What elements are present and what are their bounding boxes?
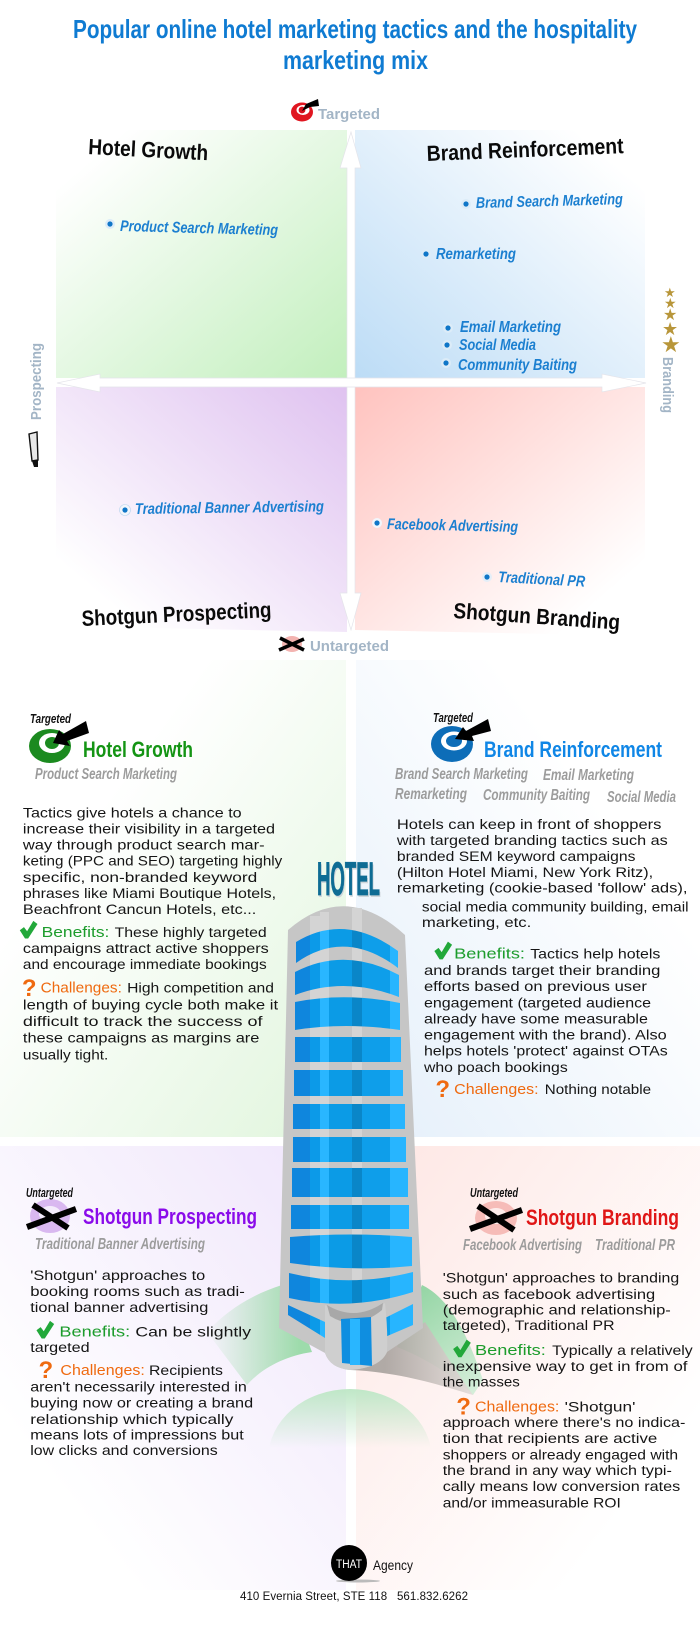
text block: description and pros and cons: increase their visibility in a targeted [23, 820, 275, 836]
text block: description and pros and cons: and/or immeasurable ROI [443, 1494, 621, 1510]
item: brand search marketing: Brand Search Marketing [476, 191, 623, 212]
axis label: prospecting [28, 343, 45, 467]
item: product search marketing: Product Search Marketing [120, 218, 279, 239]
tactics list: Facebook Advertising [463, 1237, 582, 1254]
text block: description and pros and cons: specific, non-branded keyword [23, 869, 257, 885]
axis label: branding [659, 286, 681, 413]
text block: description and pros and cons: Nothing notable [545, 1081, 651, 1097]
icon: gold stars: ★ [662, 319, 678, 340]
text block: description and pros and cons: and encourage immediate bookings [23, 956, 267, 972]
tactics list: Brand Search Marketing [395, 766, 528, 783]
text block: description and pros and cons: difficult to track the success of [23, 1013, 263, 1029]
text block: description and pros and cons: (demographic and relationship- [443, 1302, 671, 1318]
text block: description and pros and cons: tional banner advertising [30, 1299, 208, 1315]
text block: description and pros and cons: usually tight. [23, 1046, 108, 1062]
ground disc [268, 1389, 432, 1529]
text block: description and pros and cons: means lots of impressions but [30, 1427, 244, 1443]
panel: shotgun prospecting details [26, 1185, 257, 1458]
text block: description and pros and cons: Benefits: [454, 945, 525, 962]
icon: crossed purple target [27, 1199, 76, 1233]
text block: description and pros and cons: Benefits: [475, 1342, 546, 1359]
text block: description and pros and cons: keting (PPC and SEO) targeting highly [23, 853, 282, 869]
tower body [279, 906, 423, 1370]
quadrant: shotgun prospecting area [56, 387, 347, 632]
text block: description and pros and cons: Tactics help hotels [530, 945, 660, 961]
illustration: hotel tower: HOTEL [318, 854, 381, 907]
text block: description and pros and cons: low clicks and conversions [30, 1442, 218, 1458]
address: 410 Evernia Street, STE 118 561.832.6262 [240, 1591, 468, 1603]
hotel sign [317, 852, 381, 907]
quadrant: hotel growth area [56, 130, 347, 378]
tower light columns [310, 908, 362, 1300]
arrow: vertical axis [340, 132, 361, 630]
icon: gold stars: ★ [663, 305, 677, 324]
text block: description and pros and cons: relationship which typically [30, 1411, 233, 1427]
text block: description and pros and cons: social media community building, email [422, 898, 689, 914]
text block: description and pros and cons: remarketing (cookie-based 'follow' ads), [397, 880, 688, 896]
text block: description and pros and cons: tion that recipients are active [443, 1430, 658, 1446]
shadow of tower [350, 1322, 473, 1395]
title [73, 14, 637, 75]
panel: hotel growth details [20, 711, 282, 1062]
axis label: untargeted [279, 636, 389, 655]
heading: shotgun prospecting: Shotgun Prospecting [83, 1204, 257, 1229]
text block: description and pros and cons: Beachfront Cancun Hotels, etc... [23, 901, 256, 917]
axis label: branding: Branding [659, 357, 676, 413]
text block: description and pros and cons: length of buying cycle both make it [23, 996, 278, 1012]
text block: description and pros and cons: campaigns attract active shoppers [23, 940, 269, 956]
tower windows [285, 920, 415, 1340]
text block: description and pros and cons: Challenges: [60, 1362, 145, 1379]
text block: description and pros and cons: Typically a relatively [552, 1342, 693, 1358]
icon: green target [29, 721, 89, 763]
text block: description and pros and cons: Challenges: [454, 1081, 539, 1098]
axis label: untargeted: Untargeted [310, 638, 389, 655]
panel: marketing mix matrix [56, 130, 646, 636]
text block: description and pros and cons [396, 816, 689, 1103]
text block: description and pros and cons: the masses [443, 1373, 520, 1389]
text block: description and pros and cons: Recipients [149, 1362, 223, 1378]
label: targeted: Targeted [433, 710, 474, 725]
tower entrance [325, 1303, 387, 1370]
text block: description and pros and cons: Tactics give hotels a chance to [23, 805, 242, 821]
text block: description and pros and cons: helps hotels 'protect' against OTAs [424, 1043, 668, 1059]
icon: crossed red target [470, 1201, 522, 1235]
item: traditional banner advertising: Traditional Banner Advertising [135, 498, 324, 518]
panel: shotgun branding details [443, 1185, 693, 1510]
text block: description and pros and cons: these campaigns as margins are [23, 1030, 260, 1046]
text block: description and pros and cons: and brands target their branding [424, 962, 660, 978]
text block: description and pros and cons: targeted [30, 1339, 90, 1355]
panel: lower quadrant backgrounds [0, 660, 700, 1590]
heading: shotgun prospecting: Shotgun Prospecting [81, 597, 272, 631]
tactic: product search marketing: Product Search Marketing [35, 766, 177, 783]
text block: description and pros and cons: cally means low conversion rates [443, 1478, 680, 1494]
axis label: prospecting: Prospecting [28, 343, 45, 420]
text block: description and pros and cons: ? [435, 1076, 450, 1103]
item: community baiting: Community Baiting [458, 357, 577, 374]
text block: description and pros and cons [30, 1267, 253, 1458]
text block: description and pros and cons: already have some measurable [424, 1010, 648, 1026]
quadrant: brand reinforcement area [355, 130, 645, 378]
ground ring: left [207, 1285, 312, 1385]
text block: description and pros and cons: marketing, etc. [422, 914, 531, 930]
text block: description and pros and cons: Benefits: [59, 1323, 130, 1340]
footer: logo and address [240, 1545, 468, 1603]
item: social media [442, 337, 536, 354]
text block: description and pros and cons: High competition and [127, 980, 274, 996]
text block: description and pros and cons: Benefits: [42, 924, 109, 941]
text block: description and pros and cons: ? [22, 975, 37, 1002]
text block: description and pros and cons: shoppers or already engaged with [443, 1446, 678, 1462]
text block: description and pros and cons: approach where there's no indica- [443, 1414, 686, 1430]
icon: gold stars [661, 286, 681, 358]
tactic: traditional banner advertising: Traditional Banner Advertising [35, 1236, 205, 1253]
text block: description and pros and cons: Challenges: [41, 980, 122, 997]
icon: gold stars: ★ [664, 286, 676, 301]
text block: description and pros and cons: Hotels can keep in front of shoppers [397, 816, 661, 832]
heading: hotel growth: Hotel Growth [83, 737, 193, 762]
quadrant: shotgun branding area [355, 387, 645, 636]
text block: description and pros and cons: aren't necessarily interested in [30, 1379, 247, 1395]
text block: description and pros and cons: 'Shotgun' approaches to [30, 1267, 205, 1283]
logo: THAT Agency [331, 1545, 413, 1582]
logo: THAT Agency: Agency [373, 1557, 413, 1573]
heading: shotgun branding: Shotgun Branding [453, 598, 621, 635]
text block: description and pros and cons: the brand in any way which typi- [443, 1462, 672, 1478]
icon: gold stars: ★ [661, 333, 681, 358]
icon: gold stars: ★ [664, 296, 677, 312]
text block: description and pros and cons [20, 805, 282, 1062]
tactics list [395, 766, 676, 806]
logo: THAT Agency: THAT [336, 1559, 362, 1571]
text block: description and pros and cons: 'Shotgun' approaches to branding [443, 1269, 679, 1285]
heading: hotel growth: Hotel Growth [88, 134, 209, 165]
text block: description and pros and cons: engagement with the brand). Also [424, 1027, 667, 1043]
icon: blue target [431, 719, 491, 762]
illustration: hotel tower [214, 862, 483, 1440]
text block: description and pros and cons: way through product search mar- [22, 836, 265, 852]
tactics list: Remarketing [395, 786, 467, 803]
item: email marketing: Email Marketing [460, 319, 561, 336]
text block: description and pros and cons: inexpensive way to get in from of [443, 1358, 688, 1374]
ground ring: right [397, 1285, 483, 1395]
text block: description and pros and cons: targeted), Traditional PR [443, 1317, 615, 1333]
heading: brand reinforcement: Brand Reinforcement [426, 133, 625, 166]
panel: brand reinforcement details [395, 710, 689, 1103]
text block: description and pros and cons: engagement (targeted audience [424, 994, 651, 1010]
text block: description and pros and cons: (Hilton Hotel Miami, New York Ritz), [397, 864, 653, 880]
text block: description and pros and cons: These highly targeted [115, 924, 267, 940]
text block: description and pros and cons: 'Shotgun' [565, 1398, 635, 1414]
item: traditional pr: Traditional PR [498, 569, 586, 591]
text block: description and pros and cons: branded SEM keyword campaigns [397, 848, 635, 864]
label: untargeted: Untargeted [26, 1185, 74, 1200]
label: untargeted: Untargeted [470, 1185, 519, 1200]
tactics list: Email Marketing [543, 767, 634, 784]
title: marketing mix [283, 45, 428, 75]
text block: description and pros and cons: ? [456, 1394, 471, 1421]
text block: description and pros and cons: who poach bookings [423, 1059, 568, 1075]
text block: description and pros and cons: Can be slightly [135, 1323, 251, 1339]
axis label: targeted: Targeted [318, 106, 380, 123]
text block: description and pros and cons: with targeted branding tactics such as [396, 832, 668, 848]
tactics list: Traditional PR [595, 1237, 675, 1254]
tactics list: Community Baiting [483, 787, 590, 804]
axis label: targeted [291, 99, 380, 123]
arrow: horizontal axis [57, 374, 646, 392]
illustration: hotel tower: HOTEL [317, 852, 380, 905]
text block: description and pros and cons: such as facebook advertising [443, 1286, 655, 1302]
text block: description and pros and cons: efforts based on previous user [424, 978, 647, 994]
text block: description and pros and cons [443, 1269, 693, 1510]
item: facebook advertising: Facebook Advertising [387, 516, 519, 536]
text block: description and pros and cons: phrases like Miami Boutique Hotels, [23, 885, 276, 901]
text block: description and pros and cons: buying now or creating a brand [30, 1394, 253, 1410]
icon: pen [29, 432, 38, 467]
text block: description and pros and cons: Challenges: [475, 1398, 559, 1415]
icon: red target [291, 99, 319, 122]
item: remarketing: Remarketing [436, 246, 516, 263]
icon: crossed out target [279, 636, 304, 652]
text block: description and pros and cons: ? [39, 1357, 53, 1384]
text block: description and pros and cons: booking rooms such as tradi- [30, 1283, 245, 1299]
label: targeted: Targeted [30, 711, 72, 726]
item: social media: Social Media [459, 337, 536, 354]
